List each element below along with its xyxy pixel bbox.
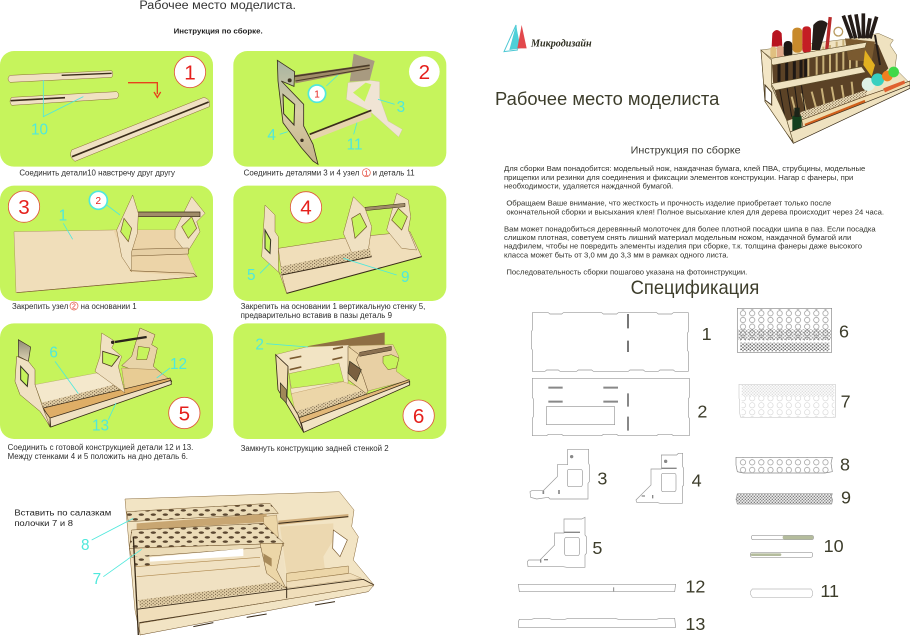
- caption: step 5: Соединить с готовой конструкцией детали 12 и 13.: [8, 443, 193, 452]
- photo: stand filled with tools: [761, 13, 910, 143]
- left page: assembly steps: [0, 0, 446, 320]
- panel: step 1: [0, 51, 213, 167]
- panel: step 4: [233, 186, 446, 301]
- photo: finished stand with shelves 7 and 8: 7: [93, 571, 101, 588]
- panel: step 5: 6: [49, 344, 58, 361]
- subheading: Инструкция по сборке: [631, 145, 741, 157]
- text: insert shelves: [14, 507, 111, 528]
- panel: step 3: 1: [59, 208, 67, 225]
- text block: instructions: прищепки или резинки для соединения и фиксации элементов конструкции. Нагар с фанеры, при: [504, 175, 853, 182]
- panel: step 1: 10: [31, 122, 48, 139]
- logo: [504, 25, 592, 52]
- part 6: 6: [839, 322, 849, 342]
- caption: step 6: Замкнуть конструкцию задней стенкой 2: [241, 444, 389, 453]
- panel: step 3: [0, 186, 213, 301]
- part 8: 8: [840, 455, 850, 475]
- part 13: 13: [685, 614, 705, 634]
- panel: step 3: 2: [96, 196, 102, 207]
- text block: instructions: Обращаем Ваше внимание, что жесткость и прочность изделие приобретает только после: [506, 200, 831, 208]
- tray: [802, 81, 910, 129]
- part 8: [736, 455, 850, 475]
- left wall: [761, 50, 793, 142]
- caption: step 5: Между стенками 4 и 5 положить на дно деталь 6.: [8, 452, 188, 461]
- shelves: [762, 42, 867, 65]
- right page: header and instructions: [495, 13, 910, 299]
- panel: step 4: 9: [401, 269, 410, 286]
- text block: instructions: [504, 165, 884, 276]
- caption: step 4: [241, 302, 425, 320]
- glue bottle: [792, 108, 802, 132]
- caption: step 3: на основании 1: [81, 302, 137, 311]
- tool handles: [772, 30, 782, 47]
- part 3: 3: [597, 469, 607, 489]
- part 12: 12: [685, 576, 705, 596]
- panel: step 6: 6: [413, 405, 424, 428]
- text block: instructions: Для сборки Вам понадобится: модельный нож, наждачная бумага, клей ПВА, струбцины, модельные: [504, 165, 865, 173]
- panel: step 5: 5: [179, 402, 190, 425]
- part 9: [736, 487, 851, 507]
- text block: instructions: Последовательность сборки пошагово указана на фотоинструкции.: [506, 268, 747, 276]
- tool shafts: [792, 38, 857, 117]
- part 10: [750, 535, 844, 557]
- caption: step 2: и деталь 11: [373, 169, 415, 178]
- part 11: [750, 581, 839, 601]
- text block: instructions: класса может быть от 3,0 мм до 3,3 мм в рамках одного листа.: [504, 251, 729, 259]
- part 7: 7: [841, 391, 851, 411]
- panel: step 5: 12: [170, 356, 187, 373]
- panel: step 5: 13: [92, 417, 109, 434]
- panel: step 2: 1: [314, 89, 320, 100]
- part 9: 9: [841, 487, 851, 507]
- logo: Микродизайн: [530, 39, 592, 50]
- part 13: [518, 614, 705, 634]
- lower left: steps 5, 6 and finished stand: [0, 323, 446, 635]
- part 12: [518, 576, 705, 596]
- caption: step 4: предварительно вставив в пазы деталь 9: [241, 311, 393, 320]
- part 1: 1: [702, 324, 712, 344]
- caption: step 2: [244, 169, 415, 178]
- panel: step 1: 1: [184, 61, 196, 84]
- text block: instructions: надфилем, чтобы не повредить элементы изделия при сборке, т.к. толщина фанеры даже высокого: [504, 243, 862, 251]
- part 5: 5: [592, 538, 602, 558]
- text block: instructions: Вам может понадобиться деревянный молоточек для более плотной посадки шипа в паз. Если посадка: [504, 225, 876, 233]
- panel: step 2: 3: [397, 99, 405, 116]
- caption: step 3: Закрепить узел: [12, 302, 69, 311]
- caption: step 5: [8, 443, 193, 461]
- panel: step 5: [0, 323, 213, 439]
- photo: finished stand with shelves 7 and 8: [81, 492, 374, 635]
- subtitle: Инструкция по сборке.: [174, 26, 263, 35]
- text: insert shelves: Вставить по салазкам: [14, 507, 111, 517]
- part 6: [737, 308, 849, 352]
- caption: step 1: Соединить детали10 навстречу друг другу: [19, 169, 175, 178]
- panel: step 6: 2: [255, 337, 264, 354]
- caption: step 4: Закрепить на основании 1 вертикальную стенку 5,: [241, 302, 425, 311]
- caption: step 3: [12, 302, 137, 311]
- text block: instructions: слишком плотная, советуем снять лишний материал модельным ножом, наждачной бумагой или: [504, 234, 851, 242]
- part 3: [530, 449, 607, 499]
- panel: step 3: 3: [18, 196, 30, 219]
- panel: step 6: [233, 323, 446, 439]
- part 7: [739, 384, 851, 417]
- part 2: 2: [697, 401, 707, 421]
- heading: Рабочее место моделиста: [495, 88, 720, 109]
- text block: instructions: необходимости, удаляется наждачной бумагой.: [504, 183, 673, 191]
- heading: specification: Спецификация: [631, 278, 759, 299]
- paint jars: [862, 78, 875, 91]
- caption: step 3: 2: [72, 304, 76, 311]
- perforated strip: [800, 90, 867, 119]
- text: insert shelves: полочки 7 и 8: [14, 518, 73, 528]
- panel: step 4: 4: [300, 197, 312, 220]
- part 4: 4: [692, 471, 702, 491]
- part 5: [527, 517, 602, 567]
- panel: step 2: 11: [347, 137, 363, 154]
- text block: instructions: окончательной сборки и высыхания клея! Полное высыхание клея для дерева происходит через 24 часа.: [506, 208, 884, 216]
- part 1: [531, 313, 712, 371]
- caption: step 2: 1: [364, 170, 368, 177]
- part 11: 11: [820, 581, 839, 601]
- specification parts: [518, 308, 851, 634]
- part 2: [532, 378, 707, 436]
- part 10: 10: [824, 536, 844, 556]
- part 4: [636, 453, 702, 503]
- panel: step 2: [233, 51, 446, 167]
- panel: step 2: 2: [419, 61, 430, 84]
- caption: step 2: Соединить деталями 3 и 4 узел: [244, 169, 360, 178]
- photo: finished stand with shelves 7 and 8: 8: [81, 537, 90, 554]
- panel: step 2: 4: [267, 127, 276, 144]
- panel: step 4: 5: [247, 267, 256, 284]
